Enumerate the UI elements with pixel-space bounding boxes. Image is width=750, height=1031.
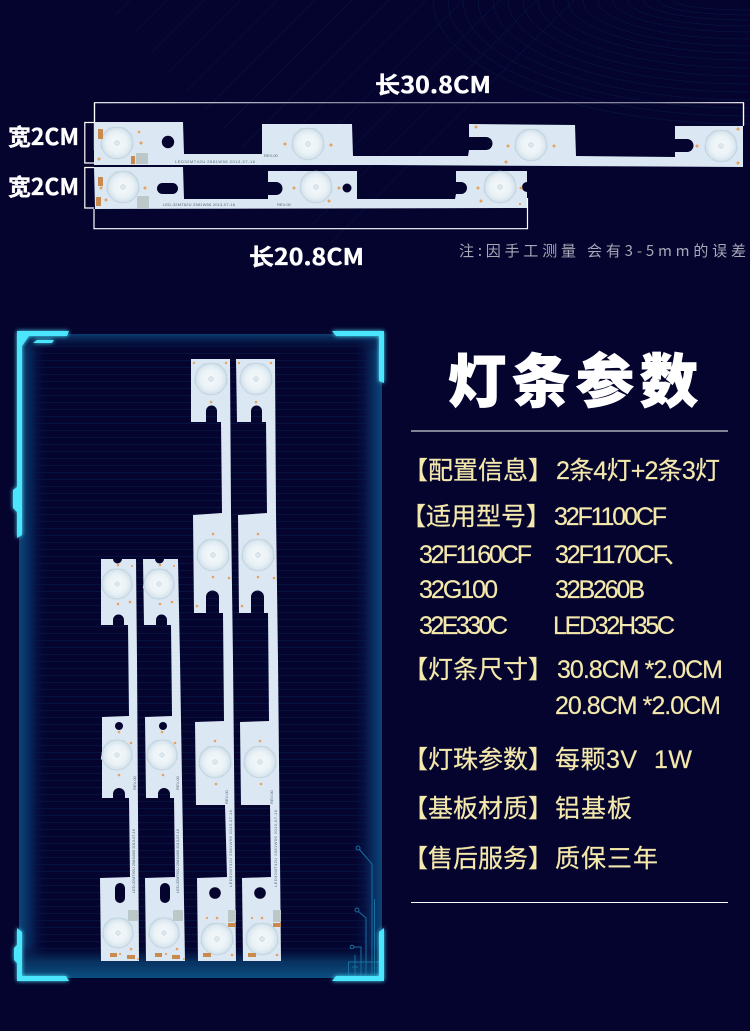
heading: width 2CM top: 宽2CM xyxy=(8,118,79,152)
LED strip: 20.8CM horizontal: REV-00 xyxy=(277,202,292,207)
LED strip: vertical 4-lamp A: REV-00 xyxy=(224,789,229,804)
measure box: short strip xyxy=(94,198,528,229)
spec list xyxy=(401,451,723,875)
LED strip: vertical 3-lamp C xyxy=(100,559,139,961)
divider: top xyxy=(411,430,728,432)
spec: bead parameters: 每颗3V xyxy=(555,746,637,774)
LED strip: vertical 3-lamp C: LED-32MT62U 2581W56 2013-07-16 xyxy=(131,828,136,893)
LED strip: vertical 3-lamp D: REV-00 xyxy=(175,775,180,790)
LED strip: 30.8CM horizontal: REV-00 xyxy=(264,153,279,158)
frame corner: bottom left xyxy=(14,928,69,981)
LED strip: vertical 3-lamp D: LED-32MT62U 2581W56 2013-07-16 xyxy=(175,828,180,893)
divider: bottom xyxy=(411,902,728,903)
spec: configuration: 【配置信息】 xyxy=(403,451,553,487)
LED strip: vertical 4-lamp A: LED32MT42U 2581W56 2013-07-16 xyxy=(228,809,233,887)
spec: compatible models: LED32H35C xyxy=(553,612,675,640)
spec: board material: 【基板材质】 xyxy=(403,789,553,825)
measurement note: 注:因手工测量 会有3-5mm的误差 xyxy=(459,240,746,261)
LED strip: vertical 3-lamp C: REV-00 xyxy=(132,775,137,790)
spec: compatible models: 【适用型号】 xyxy=(401,497,551,533)
background line pattern xyxy=(115,0,750,243)
LED strip: vertical 3-lamp D xyxy=(143,559,185,961)
heading: length 30.8CM: 长30.8CM xyxy=(375,66,491,100)
spec: bead parameters: 【灯珠参数】 xyxy=(403,740,553,776)
spec: board material xyxy=(403,789,632,825)
measure bracket: width bottom xyxy=(85,168,94,208)
spec: after-sales: 【售后服务】 xyxy=(403,839,553,875)
spec: compatible models: 、 xyxy=(664,535,689,571)
LED strip: vertical 4-lamp B xyxy=(236,359,281,961)
spec: compatible models: 32G100 xyxy=(419,576,498,604)
LED strip: vertical 4-lamp A xyxy=(191,359,236,961)
spec: strip size: 30.8CM *2.0CM xyxy=(557,656,723,684)
LED strip: 30.8CM horizontal: LED32MT42U 2581W56 2013-07-16 xyxy=(175,159,256,164)
spec: compatible models: 32B260B xyxy=(555,576,645,604)
spec: configuration xyxy=(403,451,720,487)
LED strip: vertical 4-lamp B: REV-00 xyxy=(269,789,274,804)
spec: bead parameters: 1W xyxy=(654,746,692,774)
LED strip: 30.8CM horizontal xyxy=(94,122,743,167)
frame corner: top right xyxy=(332,331,384,383)
spec: board material: 铝基板 xyxy=(555,789,632,825)
spec: after-sales: 质保三年 xyxy=(555,839,658,875)
LED strip: 20.8CM horizontal: LED-32MT62U 2581W56 2013-07-16 xyxy=(163,202,236,207)
spec: strip size xyxy=(403,650,723,720)
spec: configuration: 2条4灯+2条3灯 xyxy=(556,457,720,485)
spec: compatible models: 32E330C xyxy=(419,612,508,640)
spec: after-sales xyxy=(403,839,658,875)
measure bracket: width top xyxy=(85,122,94,163)
title: 灯条参数 xyxy=(448,335,698,419)
LED strip: vertical 4-lamp B: LED32MT42U 2581W56 2013-07-16 xyxy=(273,809,278,887)
spec: strip size: 20.8CM *2.0CM xyxy=(555,692,721,720)
spec: compatible models: 32F1160CF xyxy=(419,541,532,569)
heading: length 20.8CM: 长20.8CM xyxy=(249,238,364,272)
spec: bead parameters xyxy=(403,740,692,776)
measure box: long strip xyxy=(94,103,744,150)
frame corner: bottom right xyxy=(332,928,384,981)
spec: compatible models: 32F1100CF xyxy=(554,503,667,531)
spec: strip size: 【灯条尺寸】 xyxy=(403,650,553,686)
panel: strip photo frame xyxy=(19,334,382,978)
heading: width 2CM bottom: 宽2CM xyxy=(8,168,79,202)
frame corner: top left xyxy=(13,331,69,538)
LED strip: 20.8CM horizontal xyxy=(94,167,527,209)
icon: circuit traces xyxy=(348,846,380,975)
spec: compatible models: 32F1170CF xyxy=(555,541,668,569)
spec: compatible models xyxy=(401,497,689,640)
